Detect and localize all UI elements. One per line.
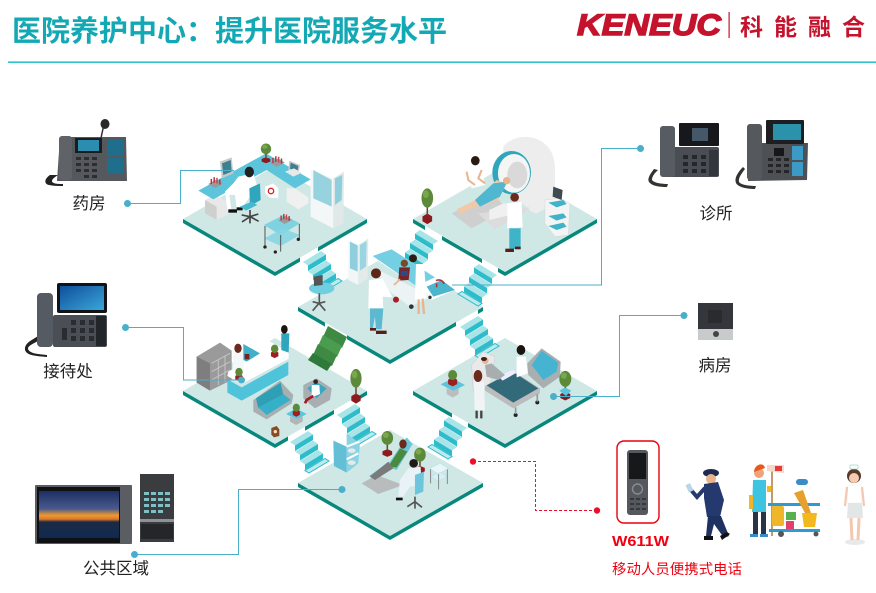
equipment rack [545,187,570,237]
cabinet [311,170,344,228]
icon: ward intercom [698,303,733,340]
icon: clinic video phone [648,123,719,187]
scene: MRI room [422,137,570,252]
connector: pharmacy [124,170,234,207]
label: W611W: W611W [612,533,670,550]
luggage box [271,426,279,437]
sofa [253,381,293,419]
stool with monitor [309,275,334,311]
label: pharmacy: 药房 [72,194,106,213]
stairs: teal flights [290,230,499,473]
doctor [368,268,399,334]
desk pedestals [205,188,308,220]
dental chair [362,437,413,494]
MRI scanner [492,137,555,213]
label: ward: 病房 [698,356,732,375]
monitors [220,157,302,178]
chair [240,183,261,223]
connector: public area [131,486,346,558]
connector: mobile staff (dashed) [470,458,600,514]
patient [457,177,510,214]
nurse [409,254,427,314]
scene: pharmacy [198,143,344,254]
child patient [394,260,410,285]
side table with plant [441,370,465,398]
stairs: green flight [308,326,347,371]
plant [559,371,571,400]
reception desk [227,336,289,401]
nurse [467,156,485,188]
icon: door keypad [140,474,174,542]
icon: reception video phone [25,283,107,357]
nurse [474,370,485,418]
pharmacist [225,167,257,213]
desk plants [235,345,278,381]
scanner table [452,197,530,229]
label: clinic: 诊所 [700,204,732,223]
logo: KENEUC 科能融合: KENEUC [577,9,723,42]
side table [286,404,307,425]
first aid box [265,183,278,198]
trolley [430,463,448,489]
panel: floor plates [183,166,597,540]
connector: clinic [452,145,644,285]
doctor [505,193,523,252]
receptionist [233,344,249,370]
shelf [333,433,360,473]
logo: KENEUC 科能融合: 科能融合 [740,14,865,40]
plants [382,431,426,474]
hospital bed [472,352,540,417]
scene: reception [197,325,362,437]
patient [481,357,505,380]
label: mobile staff handset: 移动人员便携式电话 [612,561,742,578]
header rule [8,62,876,63]
icon: cleaner with cart [749,464,820,537]
filing cabinet [197,343,232,391]
icon: video door station tablet [35,485,132,544]
icon: security guard [685,469,730,540]
label: public area: 公共区域 [83,559,149,578]
examination bed [372,249,455,309]
tall plant [350,369,362,404]
dentist [396,459,422,500]
connector: reception [122,324,245,384]
trolley [263,214,300,254]
icon: pharmacy desk phone with microphone [45,119,127,186]
connector: ward [550,312,688,400]
icon: clinic desk phone [735,120,808,189]
L-shaped desk [198,153,311,199]
scene: dental / public area [333,431,448,509]
desk plant [261,143,271,163]
logo: KENEUC 科能融合 [577,9,865,42]
plant [422,188,433,224]
icon: nurse [845,465,865,545]
scene: ward [441,345,571,418]
stool [407,472,424,509]
title: 医院养护中心：提升医院服务水平 [12,15,447,48]
standing woman [281,325,289,353]
vials [208,156,285,188]
visitor [517,345,528,377]
label: reception: 接待处 [43,362,93,381]
icon: W611W handset in red frame [617,441,659,523]
patient [370,439,407,480]
armchair with visitor [303,378,332,408]
scene: central treatment room [309,238,455,334]
visitor chair [527,348,561,388]
glass cabinet [348,238,368,285]
